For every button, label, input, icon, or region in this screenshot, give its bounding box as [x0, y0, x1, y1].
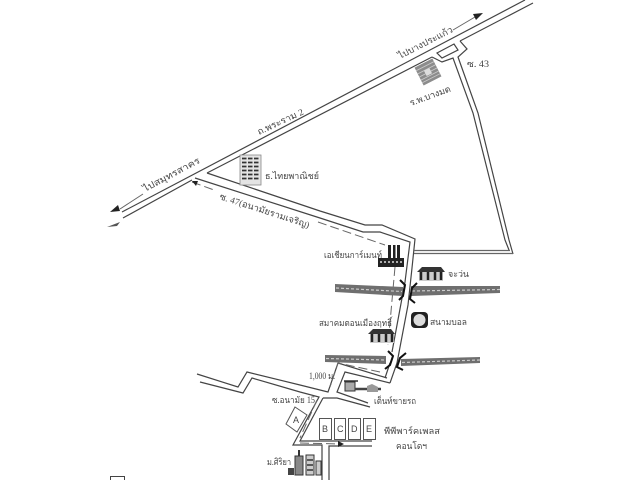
- label: soi 43: ซ. 43: [467, 59, 490, 69]
- label: Bangmod hospital: ร.พ.บางมด: [408, 84, 452, 108]
- condo block C: C: [337, 424, 344, 434]
- label: association: สมาคมตอนเมืองฤทธิ์: [319, 316, 393, 328]
- canal: upper: [335, 284, 500, 296]
- road: soi 47: [195, 173, 415, 383]
- arrow: to Samut Sakhon: [107, 194, 143, 227]
- road: Rama 2 main highway: [122, 0, 533, 218]
- icon: bank building: [240, 155, 261, 185]
- icon: car tent: [344, 381, 381, 392]
- condo block B: B: [322, 424, 328, 434]
- condo block C: [334, 418, 346, 440]
- road: lower network: [197, 363, 390, 480]
- arrow: to Bang Prakaeo: [453, 13, 483, 30]
- label: Rama 2 road: ถ.พระราม 2: [256, 107, 305, 137]
- label: to Bang Prakaeo: ไปบางประแก้ว: [395, 25, 454, 61]
- icon: city buildings: [288, 450, 321, 475]
- dashed route: [192, 181, 395, 447]
- label: car tent: เต็นท์ขายรถ: [374, 394, 416, 406]
- icon: house upper: [417, 267, 445, 281]
- label: Thai Panich bank: ธ.ไทยพาณิชย์: [265, 170, 319, 181]
- icon: hospital: [415, 59, 441, 85]
- label: to Samut Sakhon: ไปสมุทรสาคร: [140, 155, 202, 195]
- label: Asian Garment: เอเชียนการ์เมนท์: [324, 249, 382, 260]
- condo block E: E: [366, 424, 372, 434]
- icon: bridge lower: [385, 351, 406, 370]
- condo block E: [364, 418, 376, 440]
- road: soi 43: [414, 41, 513, 254]
- label: Siriya village: ม.ศิริยา: [267, 457, 291, 467]
- label: house upper: จะว่น: [448, 269, 469, 279]
- label: football field: สนามบอล: [430, 317, 467, 327]
- label: condo: คอนโดฯ: [396, 441, 427, 451]
- legend box fragment: [110, 476, 124, 480]
- label: distance: 1,000 ม.: [309, 371, 335, 381]
- icon: football field: [411, 312, 428, 328]
- condo block A: [286, 407, 307, 432]
- label: PP Park Place: พีพีพาร์คเพลส: [384, 425, 441, 436]
- condo block B: [320, 418, 332, 440]
- icon: bridge upper: [399, 280, 417, 303]
- icon: house lower: [368, 329, 395, 343]
- label: soi 47: ซ. 47(อนามัยรามเจริญ): [218, 191, 311, 230]
- condo block A: A: [293, 415, 299, 425]
- condo block D: D: [351, 424, 358, 434]
- condo block D: [348, 418, 360, 440]
- canal: lower: [325, 355, 480, 366]
- label: soi Anamai 15: ซ.อนามัย 15: [272, 395, 315, 405]
- icon: factory: [378, 245, 404, 267]
